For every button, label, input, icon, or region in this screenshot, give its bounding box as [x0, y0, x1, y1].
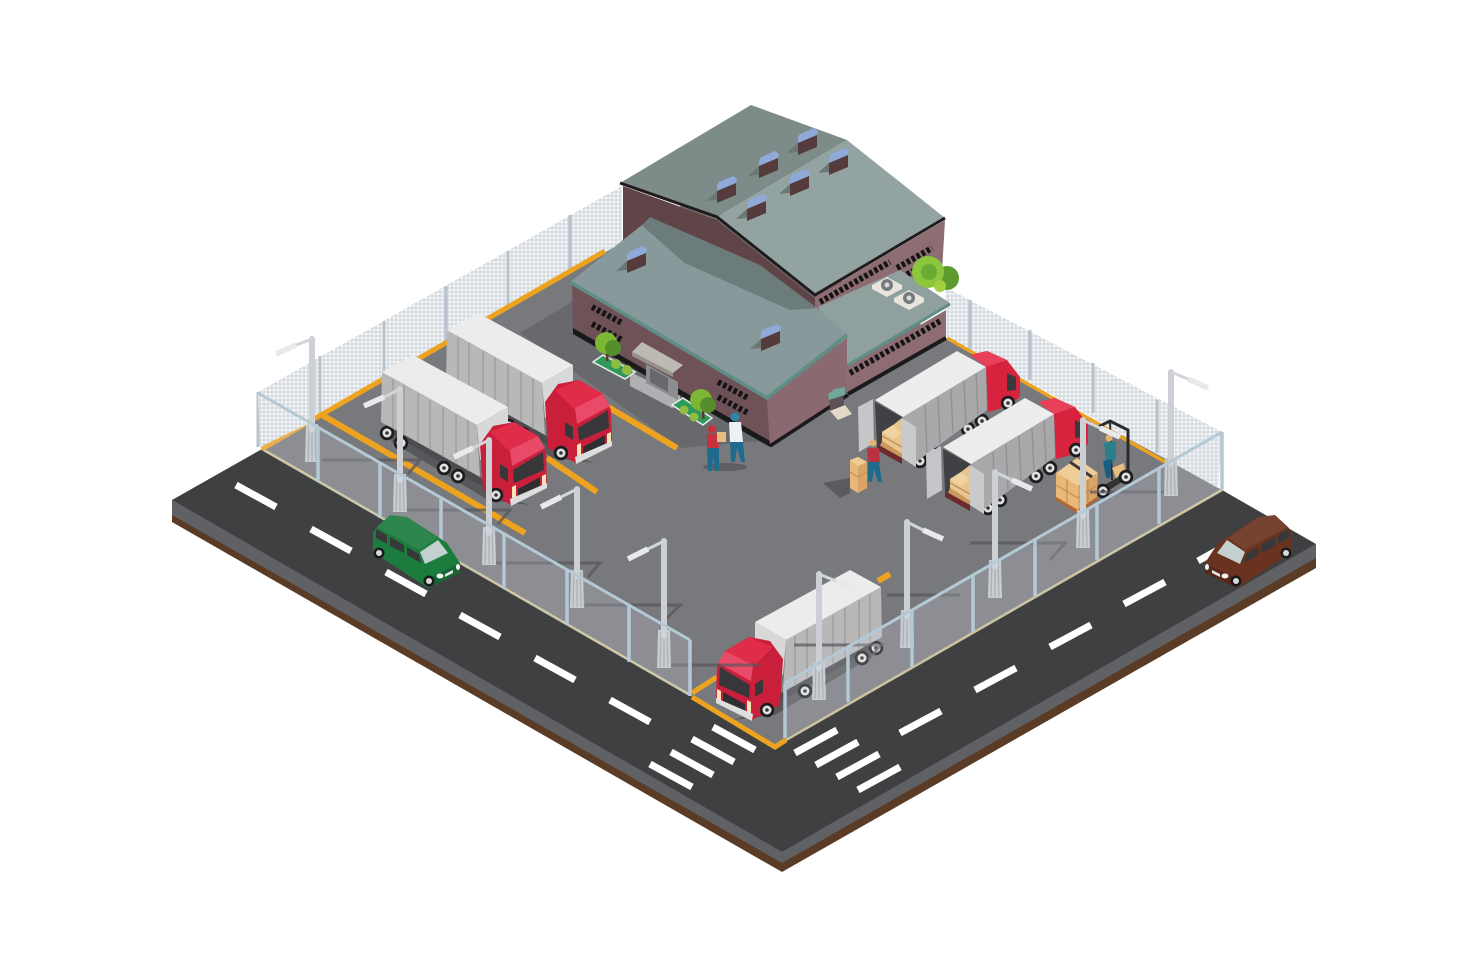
lamp post bases [305, 424, 1178, 700]
red truck at front corner [716, 570, 883, 721]
lamp shadows on ground [322, 460, 1170, 665]
entrance portico [630, 342, 683, 408]
annex wall [848, 310, 946, 394]
rear hall roof [620, 105, 945, 295]
side door with canopy [828, 387, 852, 420]
brown car on right road [1205, 515, 1292, 588]
planter with tree: right of entrance [672, 389, 716, 425]
road kerb edges [262, 449, 1222, 740]
red truck parked rear row [445, 313, 612, 464]
rear hall windows [820, 248, 932, 302]
rear hall side wall [623, 186, 815, 312]
roof vents [706, 128, 849, 221]
front hall vents [616, 246, 781, 351]
front hall roof [570, 217, 847, 398]
road lane markings [236, 485, 1232, 733]
ground slab side: soil and kerb [172, 500, 1316, 872]
warehouse building [570, 105, 959, 447]
pallet of cartons [1056, 458, 1098, 514]
open-door truck unloading, front [926, 398, 1088, 515]
worker with clipboard [729, 412, 745, 462]
rear hall right wall [815, 220, 945, 345]
front fence: left side, translucent [258, 393, 690, 696]
forklift with driver and pallet [1056, 421, 1133, 514]
open-door truck unloading, rear [858, 351, 1020, 468]
green car on left road [373, 515, 460, 588]
bush beside annex [912, 256, 959, 292]
lamp poles and arms [276, 339, 1208, 668]
front hall windows [592, 307, 748, 413]
annex roof [818, 270, 950, 365]
yard painted parking lines [262, 251, 1167, 747]
yard asphalt [262, 199, 1222, 748]
worker with parcel trolley [823, 440, 882, 498]
air conditioning units [872, 277, 924, 310]
back fence: right [945, 287, 1222, 488]
back fence: left [258, 186, 622, 447]
front hall right wall [767, 338, 848, 446]
front fence: right side, translucent [785, 432, 1222, 738]
planter with tree: left of entrance [593, 332, 635, 379]
red truck parked front row [380, 355, 547, 506]
road surface [172, 449, 1316, 852]
two workers with parcel [703, 412, 747, 471]
crosswalks [650, 727, 900, 790]
front hall left wall [572, 285, 770, 447]
worker holding box [707, 425, 726, 471]
